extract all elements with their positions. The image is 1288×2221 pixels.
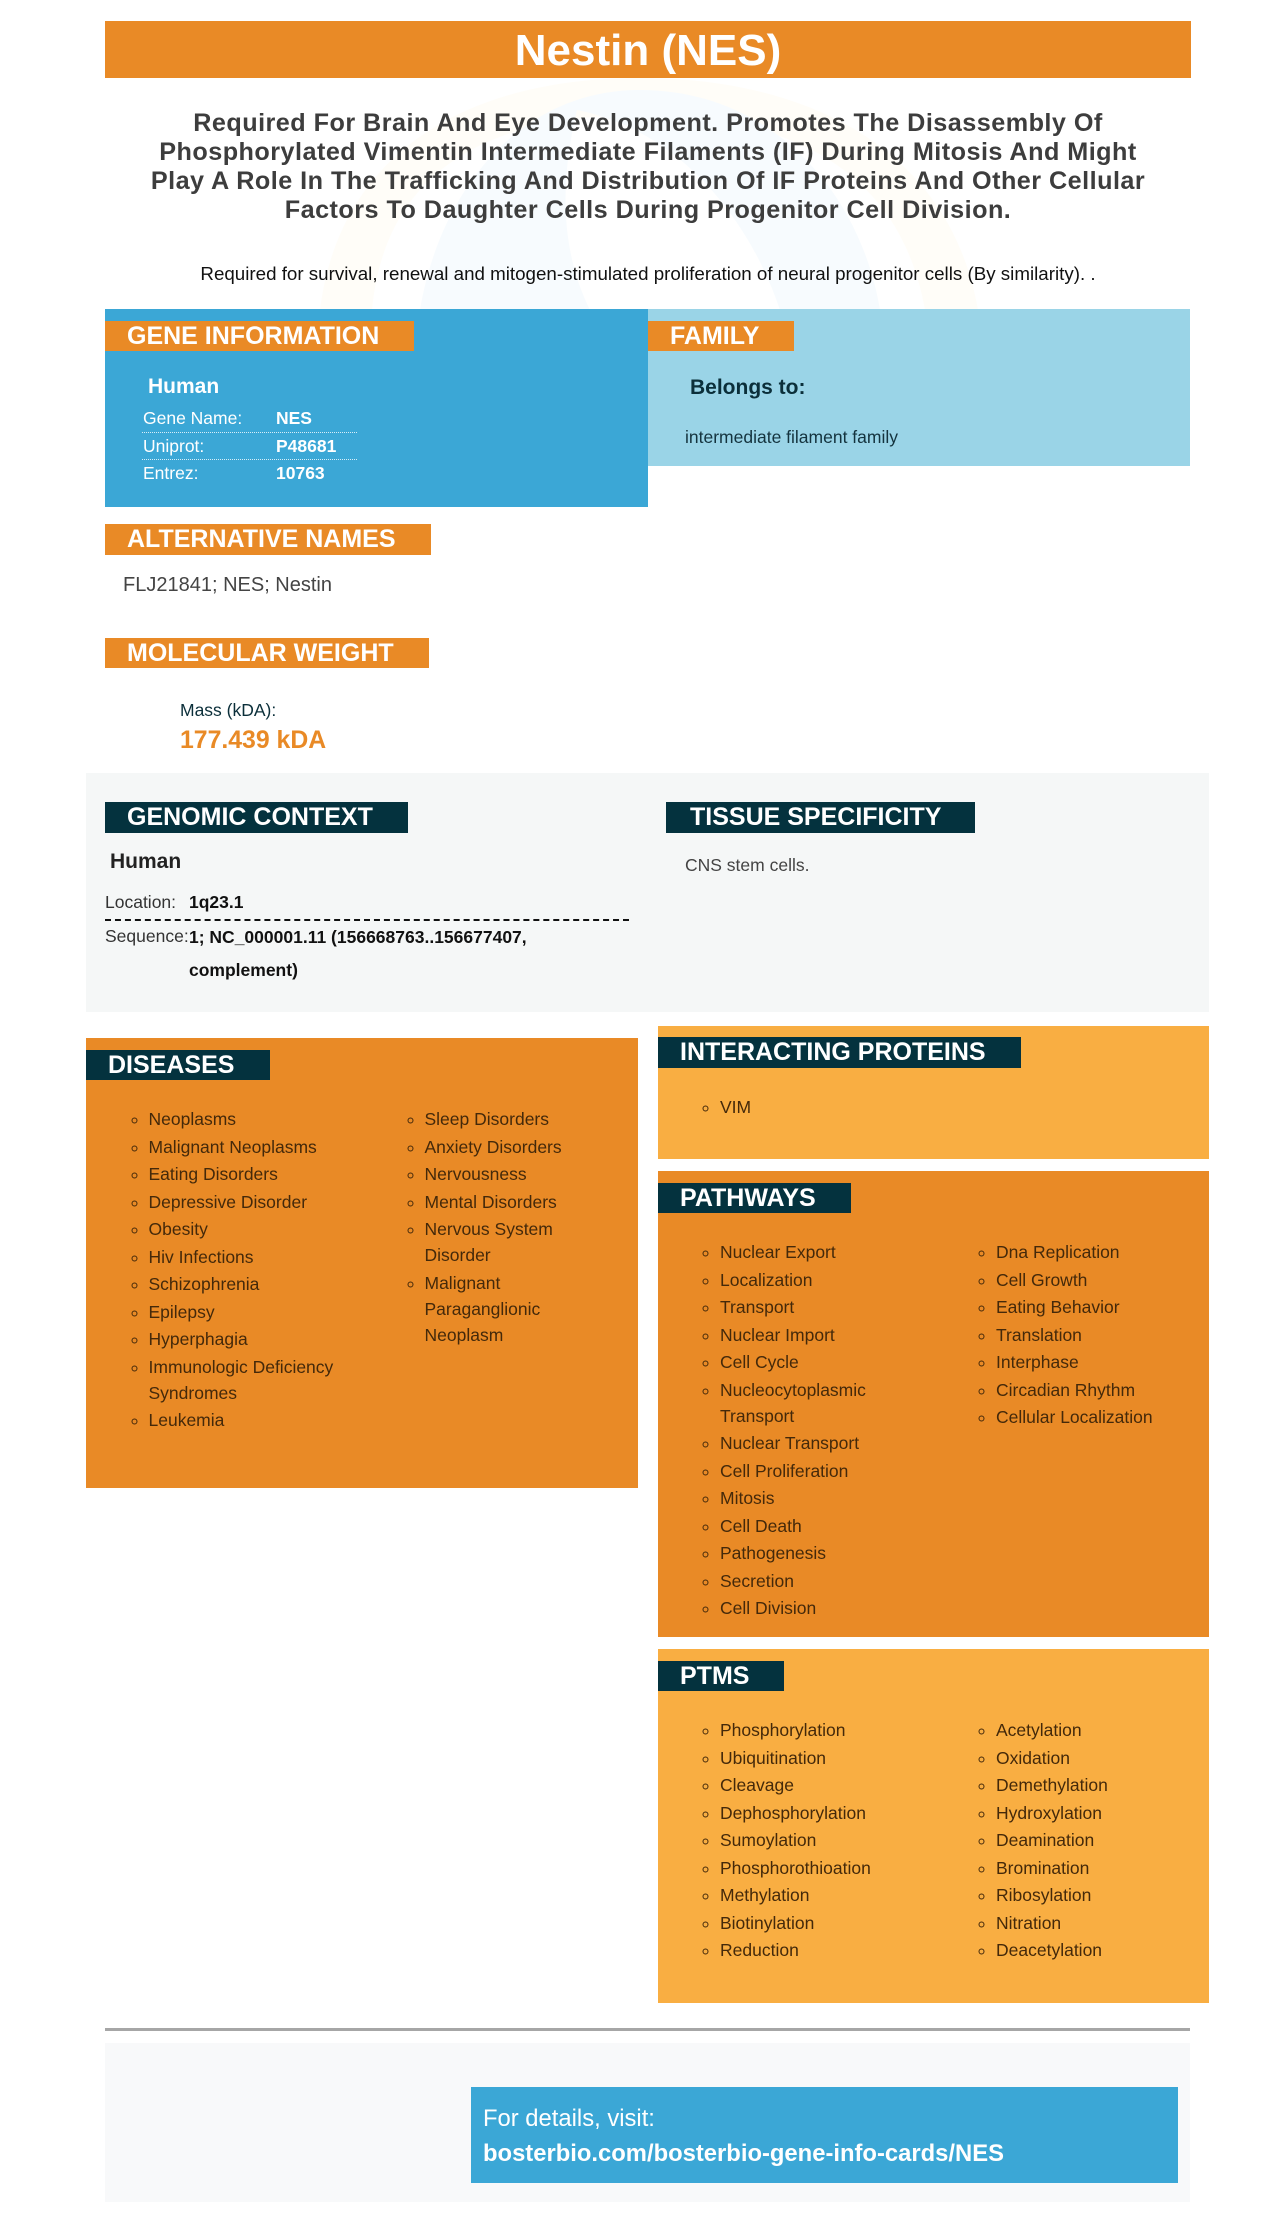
entrez row (143, 463, 325, 483)
species label: Human (110, 850, 181, 873)
title: Nestin (NES) (515, 26, 781, 75)
list column 2: Paraganglionic (424, 1299, 540, 1319)
list column 2: Cellular Localization (996, 1407, 1153, 1427)
list column 1: Cell Death (720, 1516, 802, 1536)
list column 2: Deamination (996, 1830, 1094, 1850)
subtitle: Phosphorylated Vimentin Intermediate Filaments (IF) During Mitosis And Might (159, 138, 1137, 166)
list column 1: Nuclear Transport (720, 1433, 859, 1453)
uniprot row (142, 433, 357, 460)
list column 1: Hyperphagia (148, 1329, 248, 1349)
list column 2: Dna Replication (996, 1242, 1120, 1262)
list column 2: Malignant (424, 1273, 500, 1293)
list column 1: Obesity (148, 1219, 208, 1239)
list column 1: Neoplasms (148, 1109, 236, 1129)
list column 2: Hydroxylation (996, 1802, 1102, 1822)
list column 1: Depressive Disorder (148, 1192, 307, 1212)
list column 2: Demethylation (996, 1775, 1108, 1795)
list column 1: Cell Cycle (720, 1352, 799, 1372)
tissue specificity text: CNS stem cells. (685, 855, 809, 875)
list column 2: Bromination (996, 1858, 1089, 1878)
list column 1: Syndromes (148, 1383, 237, 1403)
callout: details link (471, 2087, 1178, 2183)
subtitle: Play A Role In The Trafficking And Distribution Of IF Proteins And Other Cellular (151, 167, 1145, 195)
sequence row: complement) (189, 960, 298, 980)
list column 1: Secretion (720, 1571, 794, 1591)
panel: genomic context and tissue specificity (86, 773, 1209, 1012)
list column 2: Anxiety Disorders (424, 1136, 562, 1156)
heading: diseases (86, 1050, 270, 1080)
list column 1: Ubiquitination (720, 1748, 826, 1768)
list column 2: Interphase (996, 1352, 1079, 1372)
list column 1: Phosphorylation (720, 1720, 846, 1740)
list column 1: Eating Disorders (148, 1164, 278, 1184)
heading: ptms (658, 1661, 784, 1691)
heading: family: FAMILY (670, 322, 759, 350)
heading: molecular weight: MOLECULAR WEIGHT (127, 639, 394, 667)
panel: gene information (105, 309, 648, 507)
gene name row: Gene Name: (143, 408, 242, 428)
panel: interacting proteins (658, 1026, 1209, 1159)
list column 2: Translation (996, 1324, 1082, 1344)
uniprot row: P48681 (276, 436, 336, 456)
mass value: 177.439 kDA (180, 727, 326, 754)
list column 2: Circadian Rhythm (996, 1380, 1135, 1400)
heading: ptms: PTMS (680, 1662, 749, 1690)
gene name row (142, 405, 357, 433)
entrez row: 10763 (276, 463, 325, 483)
callout url: bosterbio.com/bosterbio-gene-info-cards/NES (483, 2140, 1004, 2167)
panel: ptms (658, 1649, 1209, 2003)
subtitle: Factors To Daughter Cells During Progenitor Cell Division. (285, 196, 1011, 224)
list column 1: Hiv Infections (148, 1246, 254, 1266)
list column 2: Oxidation (996, 1748, 1070, 1768)
heading: genomic context: GENOMIC CONTEXT (127, 803, 373, 831)
uniprot row: Uniprot: (143, 436, 204, 456)
heading: family (648, 321, 794, 351)
list column 2: Deacetylation (996, 1940, 1102, 1960)
species label: Human (148, 375, 219, 398)
subtitle (151, 109, 1145, 224)
list column 2: Nervousness (424, 1164, 527, 1184)
heading: diseases: DISEASES (108, 1051, 234, 1079)
list column 2 (978, 1242, 1153, 1427)
list column 2: Sleep Disorders (424, 1109, 549, 1129)
heading: tissue specificity: TISSUE SPECIFICITY (690, 803, 941, 831)
location row: Location: (105, 892, 176, 912)
list: VIM (720, 1097, 751, 1117)
list column 1: Nucleocytoplasmic (720, 1380, 866, 1400)
heading: interacting proteins: INTERACTING PROTEINS (680, 1038, 986, 1066)
list column 1 (132, 1109, 334, 1430)
list column 1: Phosphorothioation (720, 1858, 871, 1878)
list column 1: Sumoylation (720, 1830, 816, 1850)
panel: family (648, 309, 1190, 466)
alternative names text: FLJ21841; NES; Nestin (123, 574, 332, 596)
list column 1: Malignant Neoplasms (148, 1136, 317, 1156)
sequence row: Sequence: (105, 926, 189, 946)
list column 1: Pathogenesis (720, 1543, 826, 1563)
list column 1: Cell Proliferation (720, 1461, 848, 1481)
list column 1: Epilepsy (148, 1302, 215, 1322)
list column 2: Ribosylation (996, 1885, 1091, 1905)
subtitle: Required For Brain And Eye Development. Promotes The Disassembly Of (193, 109, 1103, 137)
gene name row: NES (276, 408, 312, 428)
list column 1: Schizophrenia (148, 1274, 259, 1294)
list column 2 (978, 1720, 1108, 1960)
list column 1: Reduction (720, 1940, 799, 1960)
belongs to label: Belongs to: (690, 376, 806, 399)
heading: gene information: GENE INFORMATION (127, 322, 379, 350)
entrez row: Entrez: (143, 463, 198, 483)
list column 1: Dephosphorylation (720, 1802, 866, 1822)
title (105, 21, 1191, 78)
list column 1: Immunologic Deficiency (148, 1356, 333, 1376)
list column 1 (702, 1242, 866, 1618)
location row (105, 889, 629, 921)
family value: intermediate filament family (685, 427, 898, 447)
list column 1: Localization (720, 1270, 812, 1290)
sequence row (105, 926, 527, 980)
list column 1: Transport (720, 1406, 794, 1426)
list column 2: Nitration (996, 1912, 1061, 1932)
list column 1: Leukemia (148, 1410, 224, 1430)
heading: alternative names: ALTERNATIVE NAMES (127, 525, 396, 553)
list column 2 (408, 1109, 562, 1345)
mass label: Mass (kDA): (180, 700, 276, 720)
panel: pathways (658, 1171, 1209, 1637)
list column 1: Mitosis (720, 1488, 774, 1508)
list column 2: Acetylation (996, 1720, 1082, 1740)
description: Required for survival, renewal and mitogen-stimulated proliferation of neural progenitor cells (By similarity). . (200, 263, 1096, 284)
list column 2: Cell Growth (996, 1270, 1087, 1290)
list column 1: Biotinylation (720, 1912, 814, 1932)
list column 2: Disorder (424, 1245, 491, 1265)
location row: 1q23.1 (189, 892, 243, 912)
background watermark (0, 0, 1288, 320)
panel: diseases (86, 1038, 638, 1488)
list column 1: Transport (720, 1297, 794, 1317)
panel: footer (105, 2043, 1190, 2202)
list column 2: Mental Disorders (424, 1192, 557, 1212)
callout label: For details, visit: (483, 2105, 655, 2132)
heading: pathways: PATHWAYS (680, 1184, 816, 1212)
list column 2: Neoplasm (424, 1325, 503, 1345)
list column 1 (702, 1720, 871, 1960)
list column 1: Cleavage (720, 1775, 794, 1795)
list column 1: Methylation (720, 1885, 810, 1905)
list column 2: Nervous System (424, 1219, 553, 1239)
list column 1: Cell Division (720, 1598, 816, 1618)
sequence row: 1; NC_000001.11 (156668763..156677407, (189, 927, 527, 947)
heading: pathways (658, 1183, 851, 1213)
list column 1: Nuclear Import (720, 1324, 835, 1344)
list column 2: Eating Behavior (996, 1297, 1120, 1317)
list column 1: Nuclear Export (720, 1242, 836, 1262)
